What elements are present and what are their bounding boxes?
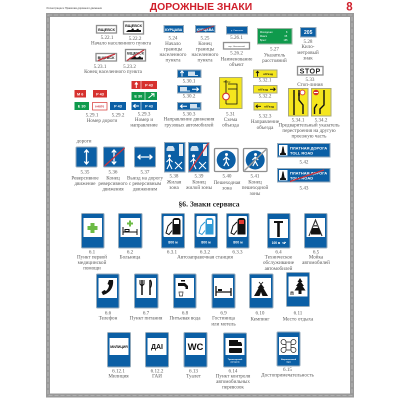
caption 6.12.2: ГАИ <box>152 374 162 380</box>
sign 5.22.1 <box>96 26 116 33</box>
label 5.26.1: 5.26.1 <box>230 35 243 41</box>
caption 5.40: зона <box>222 186 232 192</box>
caption 6.9: Гостиница <box>212 316 236 322</box>
caption 6.12.2 <box>151 368 164 380</box>
caption 5.37: Выезд на дорогу <box>127 176 163 182</box>
sign 6.14 vehicle inspection: контроль <box>230 362 240 364</box>
caption 5.39 <box>185 174 213 191</box>
caption 6.3: Автозаправочная станция <box>177 254 233 260</box>
caption 5.28: метровый <box>297 49 319 56</box>
caption 5.37 <box>127 170 163 192</box>
sign 5.26.1 <box>226 26 248 34</box>
sign 5.32.1 <box>254 70 277 78</box>
caption 5.31 <box>222 112 240 128</box>
label 6.3.2: 6.3.2 <box>200 250 211 256</box>
caption 5.26 <box>221 50 253 68</box>
caption 6.5 <box>302 250 330 266</box>
sign 5.22.2 <box>124 22 144 34</box>
caption 6.13: Туалет <box>186 374 202 380</box>
label 5.43: 5.43 <box>300 186 309 192</box>
caption 5.41: пешеходной <box>242 184 268 191</box>
header note: Иллюстрации к Правилам дорожного движения <box>46 7 103 10</box>
caption 5.28: знак <box>303 56 313 62</box>
sign 6.15 landmark <box>277 332 300 366</box>
sign 6.15 landmark: Национальный <box>281 358 297 361</box>
caption 6.4: 6.4 <box>275 250 282 256</box>
sign 5.23.1 <box>96 54 116 61</box>
sign 5.22.2: ВЩЕВСК <box>125 24 143 28</box>
sign 6.15 landmark: парк <box>286 362 291 364</box>
caption 6.6: 6.6 <box>105 310 112 316</box>
caption 5.24: пункта <box>166 58 181 64</box>
caption 5.41 <box>242 174 268 197</box>
caption 5.34: 5.34.2 <box>315 118 328 124</box>
sign 5.25: КУРЦАВА <box>197 28 214 32</box>
sign 5.27 <box>258 28 292 44</box>
caption 5.27: расстояний <box>262 57 287 64</box>
caption 5.41: зоны <box>250 191 261 197</box>
caption 6.6: Телефон <box>99 314 118 322</box>
caption 6.14: автомобильных <box>216 378 250 385</box>
caption 5.36: движения <box>102 186 124 192</box>
sign 5.29 P43 <box>93 90 107 98</box>
caption 5.28: Кило- <box>302 44 315 50</box>
sign 6.12.1 police <box>108 332 130 367</box>
sign 5.32.3: об'езд <box>264 104 274 108</box>
sign 5.39 <box>188 142 209 172</box>
caption 5.36: Конец <box>106 176 120 182</box>
sign 5.27: 65 <box>284 35 288 38</box>
caption 6.10: 6.10 <box>256 310 265 316</box>
sign 5.29 P43: Р 43 <box>96 92 104 96</box>
caption 5.29 <box>86 112 125 124</box>
caption 6.7 <box>130 310 163 322</box>
sign 5.26.2 <box>224 42 250 49</box>
caption 5.37: с реверсивным <box>129 181 162 187</box>
caption 5.35: движение <box>74 181 96 187</box>
sign 5.40 <box>214 148 238 172</box>
caption 5.29.3 <box>130 112 158 128</box>
sign 5.30.3 <box>178 102 201 110</box>
sign 6.1 first aid <box>82 214 104 248</box>
caption 5.22: Начало населенного пункта <box>91 40 152 46</box>
caption 5.26: Наименование <box>221 56 253 62</box>
sign 5.30.1 <box>178 70 201 78</box>
sign 5.29 E30 <box>74 102 89 110</box>
sign 6.12.2 GAI: ДАІ <box>151 344 163 351</box>
caption 5.25 <box>192 36 219 64</box>
caption 5.25: пункта <box>198 58 213 64</box>
caption 5.38: Жилая <box>167 180 182 186</box>
sign 6.3.1 fuel <box>162 214 184 248</box>
caption 5.29.3: 5.29.3 <box>138 112 151 118</box>
caption 6.13: 6.13 <box>189 368 198 374</box>
sign 5.24: КУРЦАВА <box>165 28 183 32</box>
caption 5.32.3 <box>251 114 280 131</box>
sign 5.43 <box>278 168 330 182</box>
caption 5.31: 5.31 <box>226 112 235 118</box>
label 5.42: 5.42 <box>300 160 309 166</box>
sign 5.26.1: р. Свислочь <box>231 30 244 32</box>
caption 5.39: 5.39 <box>195 174 204 180</box>
sign 6.2 hospital <box>118 214 142 248</box>
sign 6.6 telephone <box>96 274 119 308</box>
sign 5.42 <box>278 144 330 157</box>
caption 6.11: Место отдыха <box>283 316 314 322</box>
sign 6.4 service: 100 м <box>272 241 281 245</box>
caption 6.14: 6.14 <box>229 368 238 374</box>
caption 6.1: 6.1 <box>89 250 96 256</box>
caption 5.36: реверсивного <box>98 181 128 187</box>
sign 6.3.3 fuel: 800 м <box>233 240 243 244</box>
label 6.3.1: 6.3.1 <box>167 250 178 256</box>
sign 6.3.2 fuel <box>194 214 218 248</box>
caption 6.5: Мойка <box>309 254 324 260</box>
sign 5.37 <box>134 147 156 167</box>
caption 6.11 <box>283 310 314 322</box>
caption 6.1: медицинской <box>78 259 107 266</box>
caption 5.41: 5.41 <box>251 174 260 180</box>
sign 5.27: Минск <box>260 35 268 38</box>
sign 5.31 detour scheme: Минск <box>224 82 231 84</box>
caption 6.12.1: 6.12.1 <box>112 368 125 374</box>
label 5.32.2: 5.32.2 <box>259 94 272 100</box>
caption 5.40: Пешеходная <box>214 180 241 186</box>
caption 5.28: 5.28 <box>304 39 313 45</box>
caption 5.36 <box>98 170 128 192</box>
caption 5.31: Схема <box>224 117 238 123</box>
caption 6.9 <box>211 310 236 328</box>
label 5.32.1: 5.32.1 <box>259 78 272 84</box>
sign 5.43: TOLL ROAD <box>290 176 313 180</box>
caption 6.4 <box>263 250 295 272</box>
sign 6.5 car wash <box>304 214 327 248</box>
caption 5.37: 5.37 <box>141 170 150 176</box>
sign 6.11 rest area <box>286 272 310 306</box>
sign 5.34.1 <box>288 88 308 116</box>
caption 5.30.3: Направление движения <box>164 116 215 122</box>
label 5.30.1: 5.30.1 <box>183 78 196 84</box>
caption 5.30.3: грузовых автомобилей <box>164 122 214 128</box>
sign 5.35 <box>76 147 97 167</box>
sign 5.29.2: Р 43 <box>114 104 122 108</box>
sign 5.27: Брест <box>260 39 267 42</box>
caption 6.2: Больница <box>120 254 141 260</box>
caption 6.7: Пункт питания <box>130 316 163 322</box>
caption 6.4: Техническое <box>265 254 293 260</box>
caption 5.30.3 <box>164 112 215 128</box>
caption 5.40 <box>214 174 241 192</box>
caption 5.24: населенного <box>160 52 187 58</box>
sign 5.32.3 <box>254 102 277 110</box>
sign 5.29.3 stack: Е 30 <box>134 94 142 98</box>
caption 5.25: населенного <box>192 52 219 58</box>
sign 5.22.1: ВЩЕВСК <box>98 28 116 32</box>
sign 5.29 M6: М 6 <box>77 92 83 96</box>
sign 5.28: 205 <box>304 30 313 36</box>
caption 5.29.3: направление <box>130 122 158 128</box>
caption 5.32.3: Направление <box>251 119 280 125</box>
page number: 8 <box>346 2 353 14</box>
sign 5.29.2 <box>110 102 126 110</box>
sign 5.43: ПЛАТНАЯ ДОРОГА <box>290 170 327 176</box>
caption 6.8: 6.8 <box>182 310 189 316</box>
caption 6.13 <box>186 368 202 380</box>
caption 6.12.1 <box>108 368 129 380</box>
sign 5.29.3 stack: Р 43 <box>145 104 153 108</box>
caption 5.24: границы <box>164 46 183 52</box>
caption 6.12.1: Милиция <box>108 374 129 380</box>
section heading: §6. Знаки сервиса <box>178 200 240 208</box>
sign 6.12.1 police: МИЛИЦИЯ <box>110 345 128 349</box>
sign 5.26.2: пер. Чкаловский <box>228 45 246 48</box>
caption 5.39: жилой зоны <box>185 184 213 191</box>
title: ДОРОЖНЫЕ ЗНАКИ <box>150 2 252 13</box>
caption 5.25: границы <box>196 46 215 52</box>
caption 5.25: 5.25 <box>201 36 210 42</box>
caption 6.6 <box>99 310 118 322</box>
caption 5.24: 5.24 <box>169 36 178 42</box>
sign 6.3.3 fuel <box>226 214 249 248</box>
caption fragment дороги: дороги <box>76 138 92 144</box>
sign 5.25 <box>196 26 215 32</box>
caption 5.34 <box>278 118 340 140</box>
caption 5.35: 5.35 <box>81 170 90 176</box>
sign 6.4 service <box>268 214 290 248</box>
caption 5.34: перестроения на другую <box>282 128 336 134</box>
caption 5.31: объезда <box>222 122 240 128</box>
caption 6.10: Кемпинг <box>251 316 269 322</box>
caption 5.29: 5.29.2 <box>112 112 125 118</box>
sign 5.32.2 <box>254 86 277 93</box>
caption 6.14: Пункт контроля <box>216 374 251 380</box>
caption 5.29.3: Номер и <box>135 117 153 123</box>
caption 5.30.3: 5.30.3 <box>183 112 196 118</box>
caption 6.15 <box>261 367 315 378</box>
caption 5.25: Конец <box>198 41 212 47</box>
sign 6.3.1 fuel: 800 м <box>168 240 178 244</box>
sign 6.9 hotel <box>212 274 235 308</box>
sign 5.29 H4870 <box>92 102 107 110</box>
caption 6.15: 6.15 <box>283 367 292 373</box>
sign 5.31 detour scheme <box>220 78 242 108</box>
sign 6.7 food <box>134 274 158 308</box>
caption 6.11: 6.11 <box>294 310 303 316</box>
caption 5.34: Предварительный указатель <box>278 122 340 128</box>
caption 5.26: объект <box>229 61 245 68</box>
caption 5.23: Конец населенного пункта <box>84 69 143 75</box>
caption 6.2: 6.2 <box>127 250 134 256</box>
sign 5.32.1: об'езд <box>263 72 273 76</box>
caption 6.5: автомобилей <box>302 259 330 266</box>
sign 6.13 toilet: WC <box>188 342 204 353</box>
sign 5.34.2 <box>312 88 331 116</box>
caption 5.34: проезжую часть <box>292 134 327 140</box>
caption 5.32.3: объезда <box>257 124 274 131</box>
sign 6.8 drinking water <box>174 274 196 308</box>
caption 6.1: помощи <box>83 266 101 272</box>
caption 5.38: 5.38 <box>170 174 179 180</box>
caption 5.29: 5.29.1 <box>86 112 99 118</box>
label 5.22.1: 5.22.1 <box>101 35 114 41</box>
sign 6.12.2 GAI <box>146 332 168 367</box>
caption 6.2 <box>120 250 141 260</box>
caption 5.34: 5.34.1 <box>292 118 305 124</box>
label 5.23.1: 5.23.1 <box>94 64 107 70</box>
caption 6.5: 6.5 <box>313 250 320 256</box>
caption 6.14: перевозок <box>222 384 244 390</box>
caption 5.41: Конец <box>248 180 262 186</box>
caption 5.38 <box>167 174 182 191</box>
caption 5.36: 5.36 <box>109 170 118 176</box>
caption 6.9: 6.9 <box>220 310 227 316</box>
sign 5.36 <box>104 147 124 167</box>
sign 5.23.1: ВЩЕВСК <box>98 56 115 60</box>
caption 5.32.3: 5.32.3 <box>259 114 272 120</box>
caption 5.28 <box>297 39 319 62</box>
caption 6.7: 6.7 <box>143 310 150 316</box>
sign 5.38 <box>164 142 185 172</box>
caption 5.24: Начало <box>165 41 181 47</box>
caption 5.38: зона <box>169 185 179 191</box>
caption 6.1: Пункт первой <box>77 254 107 260</box>
caption 6.8: Питьевая вода <box>169 316 201 322</box>
caption 5.27 <box>262 46 287 64</box>
page frame <box>48 15 352 396</box>
sign 6.14 vehicle inspection <box>224 333 246 367</box>
sign 6.13 toilet <box>184 332 207 367</box>
sign 6.14 vehicle inspection: Транспортный <box>228 358 243 361</box>
caption 5.24 <box>160 36 187 64</box>
sign 5.42: TOLL ROAD <box>290 150 313 156</box>
caption 6.10 <box>251 310 269 322</box>
sign 5.29 M6 <box>74 90 86 98</box>
caption 6.4: обслуживание <box>263 259 295 266</box>
caption 5.35: Реверсивное <box>71 176 99 182</box>
sign 5.42: ПЛАТНАЯ ДОРОГА <box>290 146 327 150</box>
sign 5.27: 165 <box>284 39 288 42</box>
caption 5.27: Указатель <box>264 52 286 58</box>
sign 5.30.2 <box>178 86 201 93</box>
caption 5.33: Стоп-линия <box>297 82 323 88</box>
caption 5.37: движением <box>133 186 158 192</box>
caption 6.12.2: 6.12.2 <box>151 368 164 374</box>
sign 5.41 <box>244 148 267 172</box>
sign 5.23.2: ВЩЕВСК <box>127 52 145 56</box>
caption 5.33 <box>297 77 323 88</box>
sign 5.32.2: об'езд <box>258 88 268 92</box>
caption 6.15: Достопримечательность <box>261 372 315 378</box>
sign 6.3.2 fuel: 800 м <box>201 240 211 244</box>
sign 5.29.3 stack <box>132 81 157 110</box>
label 5.22.2: 5.22.2 <box>129 36 142 42</box>
sign 5.33 stop: STOP <box>300 66 321 75</box>
sign 6.10 camping <box>250 274 273 308</box>
caption 6.1 <box>77 250 107 272</box>
sign 5.29.3 stack: Р 43 <box>145 84 153 88</box>
caption 5.27: 5.27 <box>270 46 279 52</box>
caption 6.14 <box>216 368 251 390</box>
caption 5.40: 5.40 <box>223 174 232 180</box>
caption 6.9: или мотель <box>211 322 236 328</box>
sign 5.28 <box>300 28 316 37</box>
caption 5.29: Номер дороги <box>87 118 118 124</box>
caption 6.8 <box>169 310 201 322</box>
sign 5.24 <box>164 26 184 32</box>
label 6.3.3: 6.3.3 <box>232 250 243 256</box>
sign 5.29 E30: Е 30 <box>78 104 86 108</box>
caption 5.26: 5.26.2 <box>230 50 243 56</box>
caption 5.35 <box>71 170 99 187</box>
caption 6.4: автомобилей <box>265 265 293 272</box>
sign 5.27: 8 <box>286 31 288 34</box>
sign 5.29 H4870: Н4870 <box>95 104 104 108</box>
label 5.23.2: 5.23.2 <box>123 64 136 70</box>
label 5.30.2: 5.30.2 <box>183 94 196 100</box>
caption 5.39: Конец <box>192 180 206 186</box>
sign 5.23.2 <box>126 50 146 61</box>
caption 5.33: 5.33 <box>306 77 315 83</box>
sign 5.27: Молодечно <box>260 31 273 34</box>
